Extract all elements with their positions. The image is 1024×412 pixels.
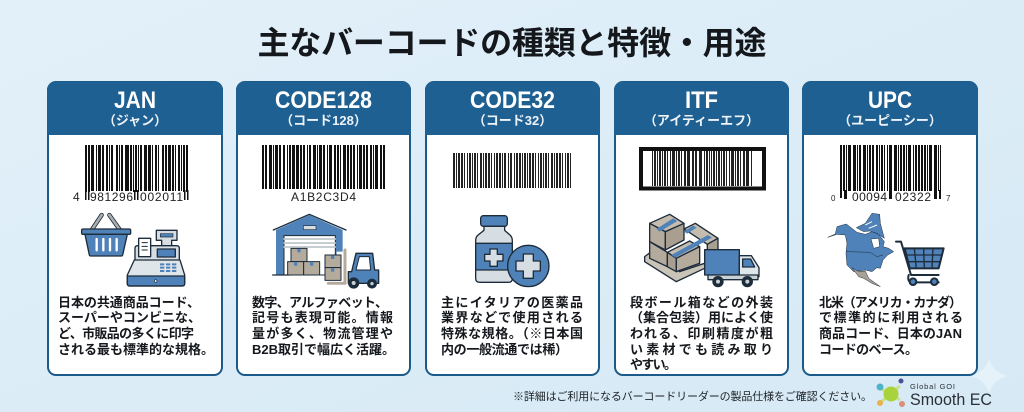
ITF header: ITF xyxy=(685,87,718,114)
ITF description: われる、印刷精度が粗 xyxy=(630,326,773,341)
JAN barcode: 002011 xyxy=(140,190,183,204)
CODE128 description: B2B取引で幅広く活躍。 xyxy=(252,342,395,357)
panel: UPC xyxy=(802,82,978,375)
UPC header: （ユーピーシー） xyxy=(838,113,942,128)
CODE32 description: 業界などで使用される xyxy=(441,310,583,325)
icon: shopping basket and cash register xyxy=(82,215,185,286)
CODE32 description: 主にイタリアの医薬品 xyxy=(441,295,583,310)
JAN barcode: 981296 xyxy=(90,190,133,204)
JAN header xyxy=(47,82,223,135)
ITF description xyxy=(630,295,773,372)
JAN description: 日本の共通商品コード、 xyxy=(58,295,200,310)
icon: medicine bottle with cross xyxy=(476,216,549,287)
CODE128 description xyxy=(252,295,395,357)
CODE128 header xyxy=(236,82,411,135)
CODE128 barcode xyxy=(262,167,385,204)
UPC barcode: 7 xyxy=(946,194,951,203)
CODE128 description: 記号も表現可能。情報 xyxy=(252,310,393,325)
UPC header: UPC xyxy=(868,87,912,114)
CODE32 header: （コード32） xyxy=(473,113,552,128)
JAN description xyxy=(58,295,214,357)
decorative sparkle xyxy=(970,358,1008,394)
CODE128 header: （コード128） xyxy=(280,113,367,128)
icon: warehouse and forklift xyxy=(273,214,379,288)
ITF description: い素材でも読み取り xyxy=(630,342,773,357)
logo: Global GOI Smooth EC: Global GOI xyxy=(910,382,955,391)
icon: North America map and shopping cart xyxy=(828,213,944,287)
ITF description: やすい。 xyxy=(630,357,677,372)
ITF header: （アイティーエフ） xyxy=(644,113,759,128)
shopping cart xyxy=(896,242,944,285)
UPC header xyxy=(802,82,978,135)
JAN description: スーパーやコンビニな、 xyxy=(58,310,201,325)
footnote: ※詳細はご利用になるバーコードリーダーの製品仕様をご確認ください。 xyxy=(513,389,872,403)
UPC barcode: 00094 xyxy=(852,190,887,204)
CODE128 barcode: A1B2C3D4 xyxy=(291,190,356,204)
CODE128 description: 量が多く、物流管理や xyxy=(252,326,393,341)
panel: JAN xyxy=(47,82,223,375)
JAN barcode xyxy=(73,168,188,204)
icon: pallet of boxes and truck xyxy=(645,214,759,287)
panel: ITF xyxy=(614,82,789,375)
CODE32 barcode xyxy=(453,153,571,188)
ITF description: 段ボール箱などの外装 xyxy=(630,295,773,310)
CODE32 description xyxy=(441,295,583,357)
UPC description: 商品コード、日本のJAN xyxy=(819,326,962,341)
panel: CODE128 xyxy=(236,82,411,375)
ITF header xyxy=(614,82,789,135)
UPC description xyxy=(819,295,963,357)
logo mark xyxy=(876,378,905,407)
JAN header: （ジャン） xyxy=(103,113,167,128)
UPC barcode: 02322 xyxy=(895,190,931,204)
ITF barcode xyxy=(641,149,764,188)
UPC barcode xyxy=(831,168,951,204)
CODE32 description: 特殊な規格。（※日本国 xyxy=(441,326,583,341)
CODE32 description: 内の一般流通では稀） xyxy=(441,342,568,357)
CODE128 header: CODE128 xyxy=(275,87,372,114)
map: North America xyxy=(828,213,894,287)
panel: CODE32 xyxy=(425,82,600,375)
UPC description: 北米（アメリカ・カナダ） xyxy=(819,295,962,310)
UPC barcode: 0 xyxy=(831,194,836,203)
CODE32 header xyxy=(425,82,600,135)
JAN description: される最も標準的な規格。 xyxy=(58,342,214,357)
JAN barcode: 4 xyxy=(73,190,80,204)
logo: Global GOI Smooth EC xyxy=(876,378,992,409)
title: 主なバーコードの種類と特徴・用途 xyxy=(258,25,766,61)
JAN description: ど、市販品の多くに印字 xyxy=(58,326,194,341)
ITF description: （集合包装）用によく使 xyxy=(630,310,773,325)
UPC description: コードのベース。 xyxy=(819,342,918,357)
JAN header: JAN xyxy=(114,87,156,114)
CODE32 header: CODE32 xyxy=(470,87,555,114)
CODE128 description: 数字、アルファベット、 xyxy=(252,295,388,310)
UPC description: で標準的に利用される xyxy=(819,310,963,325)
logo: Global GOI Smooth EC: Smooth EC xyxy=(910,390,992,409)
